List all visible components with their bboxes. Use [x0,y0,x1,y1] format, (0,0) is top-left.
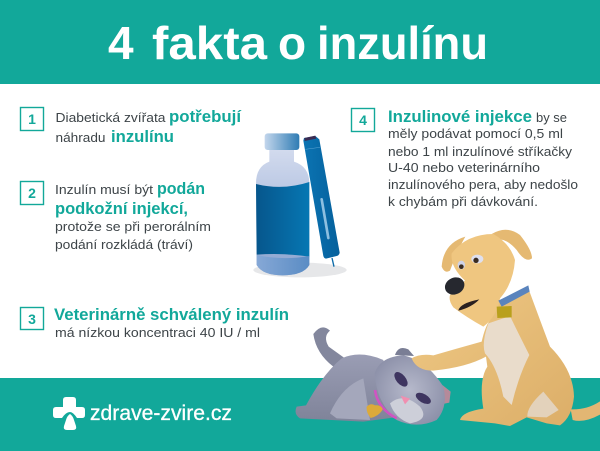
number badge 2: 2 [28,185,36,201]
pen [303,136,340,267]
fact 1 text [56,108,242,146]
title: inzulínu [317,17,488,69]
collar [498,285,530,307]
ears [442,237,465,272]
title [108,17,488,69]
fact 2 text: podání rozkládá (tráví) [55,237,193,252]
head [450,234,515,327]
fact 1 text: Diabetická zvířata [56,110,166,125]
fact 3 text: Veterinárně schválený inzulín [54,306,289,324]
number badge 3 [20,308,44,330]
fact 1 [20,108,242,146]
mouth [458,299,479,311]
body [412,288,574,426]
fact 2 text: podkožní injekcí, [55,200,188,218]
header band [0,0,600,84]
fact 4 text: by se [536,110,567,125]
fact 2 [20,180,211,252]
fact 4 text: inzulínového pera, aby nedošlo [388,177,578,192]
title: o [278,17,306,69]
illustration: golden dog [412,230,600,426]
icon: insulin vial and pen [253,133,347,277]
fact 2 text [55,180,211,252]
number badge 1 [20,108,44,130]
fact 3 text: má nízkou koncentraci 40 IU / ml [55,325,260,340]
fact 4 [352,108,578,209]
title: fakta [152,17,267,69]
number badge 3: 3 [28,311,36,327]
fact 4 text [388,108,578,209]
fact 4 text: nebo 1 ml inzulínové stříkačky [388,144,573,159]
number badge 2 [20,182,44,204]
fact 3 text [54,306,289,340]
title: 4 [108,17,134,69]
fact 4 text: U-40 nebo veterinárního [388,160,540,175]
fact 2 text: podán [157,180,205,198]
icon: cross with pet silhouette [53,397,85,430]
fact 2 text: protože se při perorálním [55,219,211,234]
fact 1 text: náhradu [56,130,106,145]
footer band [0,378,600,451]
chest [484,316,529,405]
fact 3 [20,306,289,340]
tail [571,401,600,421]
logo text: zdrave-zvire.cz [90,402,232,425]
fact 1 text: inzulínu [111,128,174,146]
fact 4 text: k chybám při dávkování. [388,194,538,209]
fact 2 text: Inzulín musí být [55,182,153,197]
number badge 4: 4 [359,112,367,128]
logo: zdrave-zvire.cz [53,397,232,430]
tag [497,306,512,318]
fact 4 text: Inzulinové injekce [388,108,532,126]
nose [442,274,467,298]
fact 4 text: měly podávat pomocí 0,5 ml [388,126,563,141]
vial [256,133,309,275]
number badge 4 [352,108,374,132]
number badge 1: 1 [28,111,36,127]
illustration: grey cat lying down [296,327,451,425]
eyes [471,255,483,263]
fact 1 text: potřebují [169,108,242,126]
